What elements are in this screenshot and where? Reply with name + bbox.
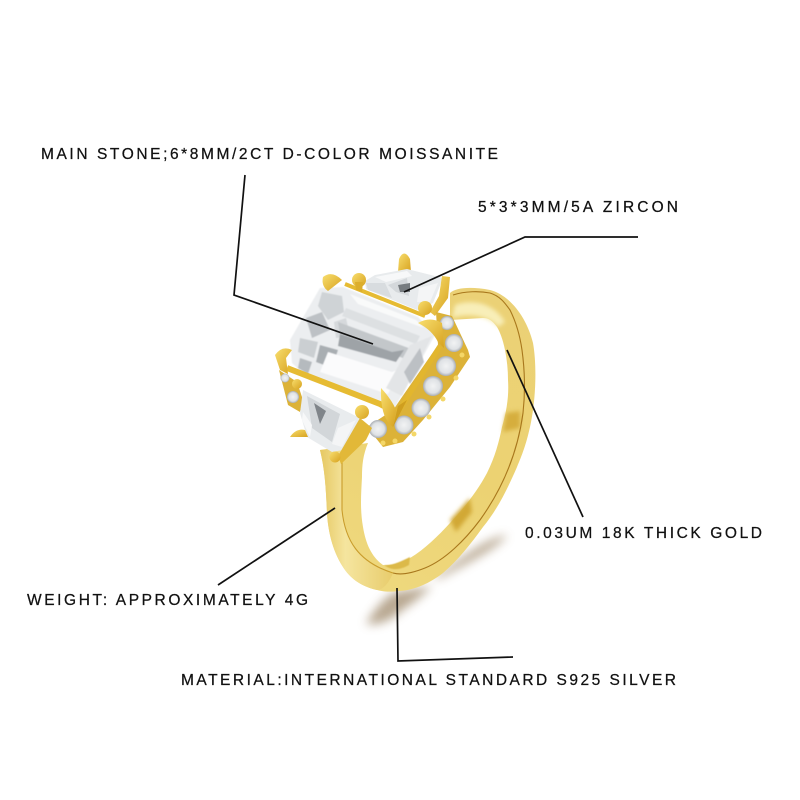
gold frame and prongs <box>275 273 444 427</box>
rear stone right prong <box>430 276 450 316</box>
prong heads <box>323 274 342 291</box>
band highlights and shadows <box>450 498 472 532</box>
halo setting <box>279 312 470 447</box>
left mosaic facets <box>318 292 344 320</box>
shank surface <box>320 448 393 590</box>
leader line: thick gold <box>507 350 583 517</box>
leader line: zircon <box>404 237 638 292</box>
halo diamonds <box>280 316 463 438</box>
left mini halo <box>279 370 303 412</box>
top prong <box>398 254 411 272</box>
shank ridge line <box>342 462 393 573</box>
front stone gold strip <box>338 418 372 464</box>
step facets <box>350 294 424 328</box>
leader line: weight <box>218 508 335 585</box>
ring illustration <box>275 254 535 592</box>
rear side stone <box>365 269 450 316</box>
main stone <box>290 287 435 407</box>
leader line: material <box>397 588 513 661</box>
ring band <box>320 288 535 592</box>
front stone claw <box>290 430 308 437</box>
halo beads <box>380 352 464 446</box>
label: weight: WEIGHT: APPROXIMATELY 4G <box>27 592 308 609</box>
label: thick gold: 0.03UM 18K THICK GOLD <box>525 525 762 542</box>
ring shadow <box>366 535 507 624</box>
label: zircon: 5*3*3MM/5A ZIRCON <box>478 199 678 216</box>
leader line: main stone <box>234 175 373 344</box>
front side stone <box>290 390 372 464</box>
band ridge line <box>393 292 524 574</box>
label: main stone: MAIN STONE;6*8MM/2CT D-COLOR MOISSANITE <box>41 146 498 163</box>
label: material: MATERIAL:INTERNATIONAL STANDARD S925 SILVER <box>181 672 676 689</box>
frame strips <box>345 284 425 316</box>
